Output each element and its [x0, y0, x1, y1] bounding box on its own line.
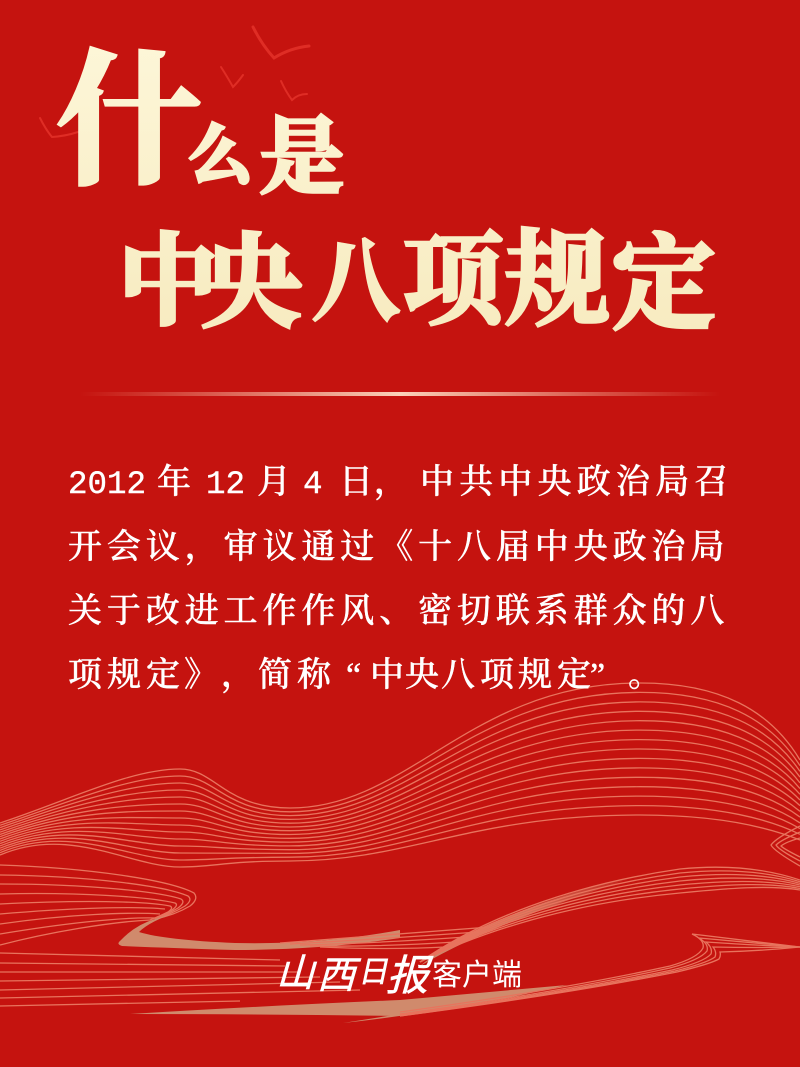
- logo: 山西日报客户端: 客户端: [432, 959, 522, 992]
- title: 什么是: 什: [56, 42, 202, 204]
- body paragraph: 月: [257, 464, 291, 501]
- body paragraph: 关于改进工作作风、密切联系群众的八: [68, 592, 724, 630]
- decorative wave: left fold ribbon: [0, 865, 490, 950]
- body paragraph: 2012: [68, 466, 146, 503]
- title: 中央八项规定: 规: [505, 224, 609, 339]
- body paragraph: 中共中央政治局召: [420, 463, 728, 501]
- title: 中央八项规定: 央: [200, 228, 302, 341]
- title: 中央八项规定: 项: [403, 226, 508, 337]
- logo: 山西日报客户端: 西: [314, 955, 365, 997]
- divider: [80, 392, 720, 396]
- title: 什么是: [56, 42, 344, 205]
- decorative wave: lower left ribbon: [0, 953, 567, 1023]
- decorative wave: rising right ribbon: [420, 867, 800, 966]
- body paragraph: [68, 463, 728, 694]
- title: 中央八项规定: 中: [118, 227, 218, 338]
- title: 什么是: 是: [260, 112, 344, 205]
- logo: 山西日报客户端: [273, 953, 522, 1000]
- title: 中央八项规定: 定: [612, 228, 716, 343]
- decorative wave: right tip ribbon: [400, 934, 800, 1016]
- icon: flying birds: [40, 27, 309, 137]
- logo: 山西日报客户端: 日: [357, 956, 393, 989]
- body paragraph: ，: [374, 464, 408, 501]
- body paragraph: 开会议，审议通过《十八届中央政治局: [68, 528, 724, 566]
- body paragraph: 日: [339, 464, 373, 501]
- title: 中央八项规定: [118, 224, 716, 343]
- title: 中央八项规定: 八: [312, 235, 400, 332]
- decorative wave: main ribbon: [0, 683, 800, 867]
- body paragraph: 4: [303, 466, 323, 503]
- body paragraph: 年: [157, 463, 191, 501]
- title: 什么是: 么: [188, 121, 256, 192]
- logo: 山西日报客户端: 报: [383, 953, 439, 1000]
- body paragraph: 12: [206, 466, 245, 503]
- body paragraph: 项规定》，简称“中央八项规定”。: [68, 656, 662, 694]
- logo: 山西日报客户端: 山: [273, 953, 324, 995]
